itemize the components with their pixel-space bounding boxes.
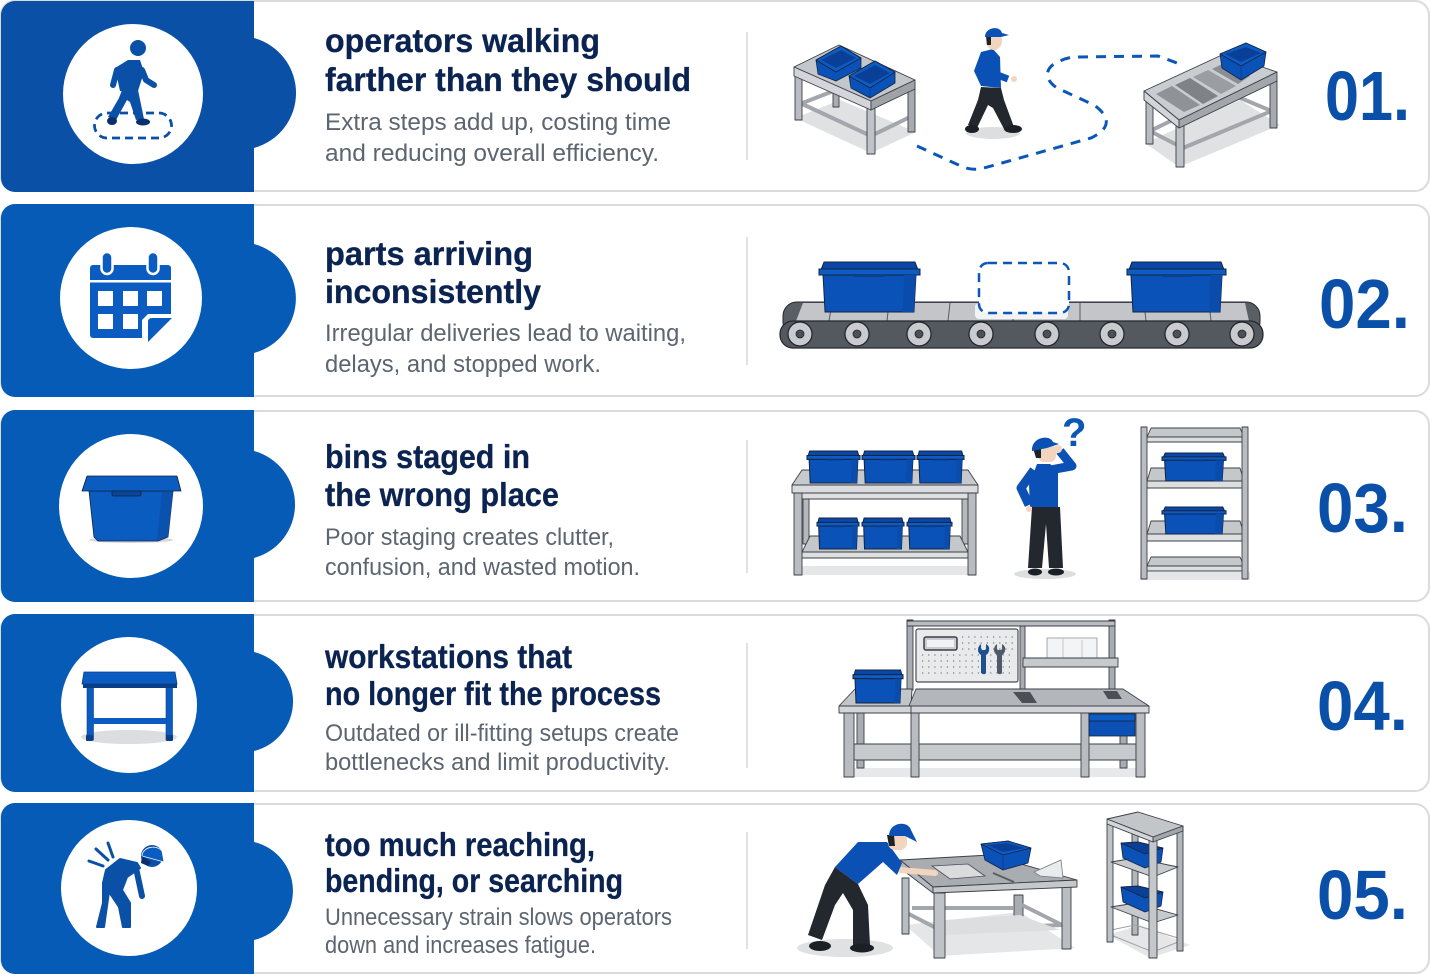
panel 1: blue tab xyxy=(1,1,296,192)
icon 4: workbench xyxy=(61,637,197,773)
card 1: operators walking xyxy=(1,1,1429,192)
text 5: down and increases fatigue. xyxy=(325,932,596,959)
heading 5: bending, or searching xyxy=(325,862,623,899)
heading 4: workstations that xyxy=(324,638,572,675)
worker puzzled xyxy=(1014,411,1086,579)
heading 3: the wrong place xyxy=(325,476,559,513)
heading 1: farther than they should xyxy=(325,61,691,98)
number 05: 05. xyxy=(1317,856,1408,934)
heading 1: operators walking xyxy=(325,22,600,59)
text 2: Irregular deliveries lead to waiting, xyxy=(325,320,686,347)
text 4: bottlenecks and limit productivity. xyxy=(325,749,670,776)
illustration 5: worker reaching over table xyxy=(797,812,1190,958)
heading 3: bins staged in xyxy=(325,438,530,475)
icon 3: bin xyxy=(59,434,203,578)
icon 2: calendar xyxy=(60,227,202,369)
text 3 xyxy=(325,524,640,581)
heading 3 xyxy=(325,438,559,513)
number 03: 03. xyxy=(1317,469,1408,547)
number 01: 01. xyxy=(1325,57,1410,135)
heading 5 xyxy=(325,826,623,899)
bin right xyxy=(1127,262,1226,312)
empty dashed slot xyxy=(975,263,1069,319)
left table with two bins xyxy=(794,45,916,154)
heading 4 xyxy=(324,638,661,712)
top bins xyxy=(807,451,964,483)
heading 5: too much reaching, xyxy=(325,826,595,863)
text 5 xyxy=(325,904,672,959)
wrenches xyxy=(978,644,1005,674)
number 02: 02. xyxy=(1319,265,1410,343)
bin on bench xyxy=(853,670,903,703)
heading 1 xyxy=(325,22,691,98)
text 4: Outdated or ill-fitting setups create xyxy=(325,720,679,747)
panel 4: blue tab xyxy=(1,614,293,792)
heading 2 xyxy=(325,235,542,310)
lower bins xyxy=(817,518,952,549)
bin under bench xyxy=(1089,714,1135,736)
rack with two bins xyxy=(1140,427,1250,580)
table xyxy=(900,855,1077,958)
heading 2: parts arriving xyxy=(325,235,533,272)
bin left xyxy=(819,262,920,312)
card 2: parts arriving xyxy=(1,204,1429,397)
text 2 xyxy=(325,320,686,378)
text 3: confusion, and wasted motion. xyxy=(325,554,640,581)
bench top xyxy=(839,689,1149,713)
text 3: Poor staging creates clutter, xyxy=(325,524,614,551)
worker walking xyxy=(965,28,1022,139)
text 1: and reducing overall efficiency. xyxy=(325,140,659,167)
panel 5: blue tab xyxy=(1,803,293,974)
text 1 xyxy=(325,109,671,167)
text 5: Unnecessary strain slows operators xyxy=(325,904,672,931)
card 5: reaching and bending xyxy=(1,803,1429,974)
icon 5: worker bending with strain marks xyxy=(61,820,197,956)
panel 3: blue tab xyxy=(1,410,295,602)
heading 2: inconsistently xyxy=(325,273,542,310)
panel 2: blue tab xyxy=(1,204,296,397)
illustration 2: conveyor with missing bin xyxy=(780,262,1263,348)
illustration 3: misplaced bins xyxy=(792,411,1250,580)
text 4 xyxy=(325,720,679,776)
bin on table xyxy=(981,841,1031,870)
illustration 4: workbench with pegboard xyxy=(839,620,1149,777)
bench frame xyxy=(844,713,1146,777)
dashed route xyxy=(917,56,1177,169)
heading 4: no longer fit the process xyxy=(325,675,661,712)
icon 1: walker on dashed loop xyxy=(63,24,203,164)
shadows xyxy=(797,912,1190,958)
conveyor belt xyxy=(780,302,1263,348)
illustration 1: walking between tables xyxy=(794,28,1280,169)
card 3: bins staged xyxy=(1,410,1429,602)
shelf with two bins xyxy=(1107,812,1183,958)
right table with bin xyxy=(1144,43,1280,167)
card 4: workstations xyxy=(1,614,1429,792)
number 04: 04. xyxy=(1317,667,1408,745)
table with six bins xyxy=(792,451,978,575)
worker bending xyxy=(808,824,935,952)
text 1: Extra steps add up, costing time xyxy=(325,109,671,136)
question mark: ? xyxy=(1062,411,1086,455)
back panel and shelf xyxy=(907,620,1118,690)
text 2: delays, and stopped work. xyxy=(325,351,601,378)
